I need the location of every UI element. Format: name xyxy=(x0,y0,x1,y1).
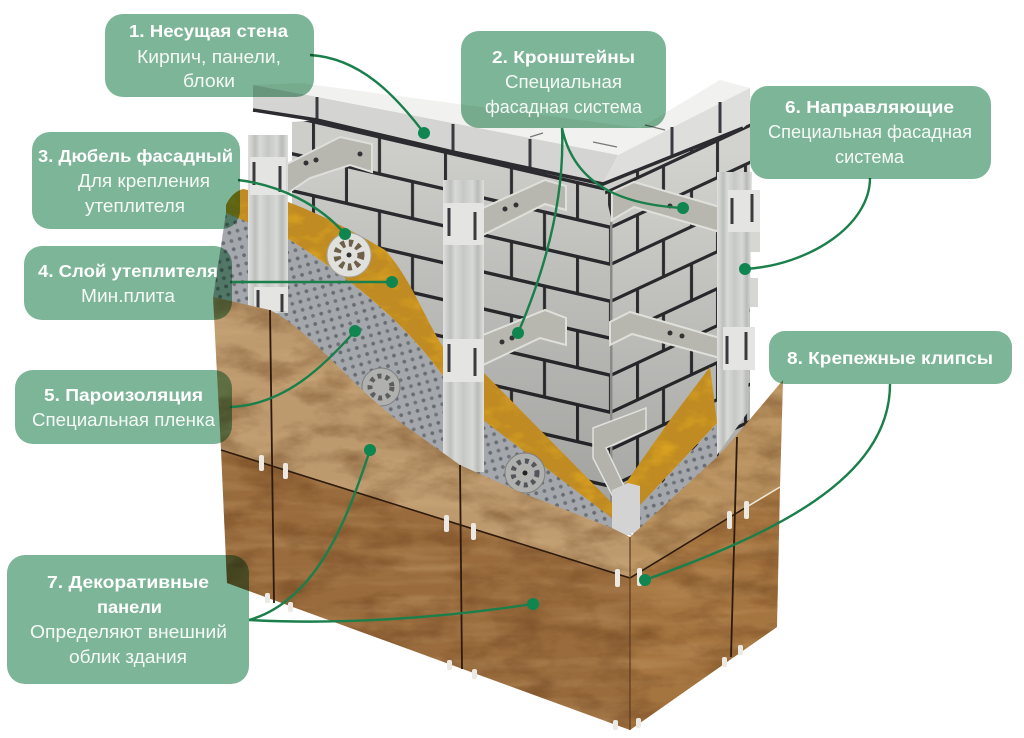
callout 6: система xyxy=(835,147,905,167)
callout 6: 6. Направляющие xyxy=(785,97,954,117)
bracket lower right xyxy=(610,312,720,358)
leader dots xyxy=(339,127,751,610)
bracket upper left xyxy=(285,137,372,195)
rail right xyxy=(717,172,760,455)
vapor barrier film xyxy=(213,213,717,536)
rail left xyxy=(248,135,288,313)
corner profile xyxy=(612,483,640,536)
callout 4 xyxy=(24,246,232,320)
callout 4: 4. Слой утеплителя xyxy=(38,261,218,281)
callout 5: Специальная пленка xyxy=(32,410,216,430)
panel lower right xyxy=(630,487,780,730)
leader 4 xyxy=(230,281,392,283)
rail middle xyxy=(443,180,484,472)
dowel lower xyxy=(505,453,545,493)
callout 6: Специальная фасадная xyxy=(768,122,972,142)
callout 1: 1. Несущая стена xyxy=(129,21,288,41)
wall top row xyxy=(253,80,750,184)
brackets xyxy=(285,137,720,365)
callout 8: 8. Крепежные клипсы xyxy=(787,348,993,368)
leader 6 xyxy=(745,178,870,269)
leader 5 xyxy=(230,331,355,407)
callout 1: блоки xyxy=(183,71,235,91)
callout 3 xyxy=(32,132,240,229)
wall right face xyxy=(603,122,750,530)
callout 7: облик здания xyxy=(69,647,187,667)
callout 5: 5. Пароизоляция xyxy=(44,385,203,405)
film right section xyxy=(633,424,717,535)
callout 7: Определяют внешний xyxy=(30,622,227,642)
film left section xyxy=(213,213,633,536)
callout 7: 7. Декоративные xyxy=(47,572,209,592)
callout 5 xyxy=(15,370,232,444)
callout 3: 3. Дюбель фасадный xyxy=(38,146,233,166)
wall shading xyxy=(334,218,750,507)
callout 1: Кирпич, панели, xyxy=(137,47,281,67)
leader 8 xyxy=(645,384,890,580)
panel upper left xyxy=(213,297,630,578)
vertical guide rails xyxy=(248,135,760,536)
panel clips xyxy=(259,455,749,730)
insulation layer xyxy=(226,189,717,520)
bracket upper right xyxy=(612,182,720,232)
callout 3: Для крепления xyxy=(78,171,210,191)
callout 8 xyxy=(769,331,1012,384)
callout 7: панели xyxy=(97,597,162,617)
panel upper right xyxy=(630,380,783,578)
decorative panels xyxy=(213,297,783,730)
callout 2: 2. Кронштейны xyxy=(492,47,635,67)
leader 7 xyxy=(249,450,533,622)
leader 2 xyxy=(518,128,683,333)
wall left face xyxy=(292,120,612,530)
bracket lower middle xyxy=(483,310,566,365)
leader 1 xyxy=(310,55,424,133)
callout 2: фасадная система xyxy=(485,97,643,117)
corner bracket small xyxy=(593,408,646,495)
wall right side brick ends xyxy=(750,217,760,307)
callout 6 xyxy=(750,86,991,179)
callout 4: Мин.плита xyxy=(81,286,176,306)
leader 3 xyxy=(238,180,345,234)
dowel upper xyxy=(327,233,371,277)
callout 2 xyxy=(461,31,666,128)
bracket upper middle xyxy=(483,180,566,235)
callout 1 xyxy=(105,14,314,97)
dowel middle xyxy=(362,368,400,406)
leader lines and dots xyxy=(230,55,890,622)
brick wall xyxy=(253,80,760,530)
callout 7 xyxy=(7,555,249,684)
panel lower left xyxy=(221,450,630,730)
wall corner xyxy=(610,222,612,522)
facade dowels xyxy=(327,233,545,493)
insulation left band xyxy=(226,189,612,520)
callout 3: утеплителя xyxy=(85,196,185,216)
insulation right band xyxy=(623,367,717,505)
callout 2: Специальная xyxy=(505,72,622,92)
